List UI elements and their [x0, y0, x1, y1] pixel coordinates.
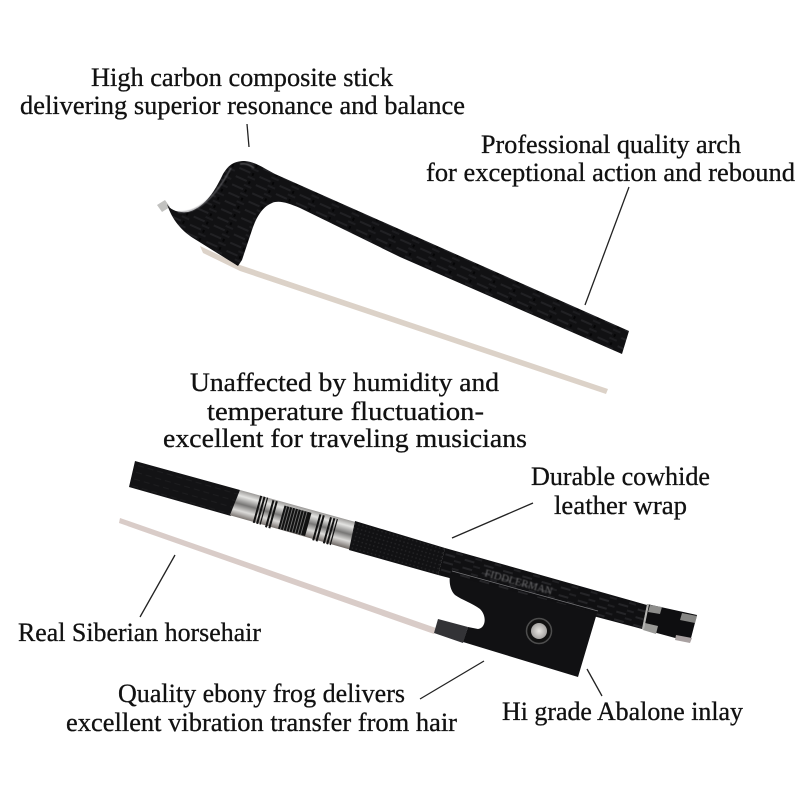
- leader line: stick: [247, 124, 249, 147]
- ferrule: [434, 619, 468, 643]
- head highlight: [178, 164, 254, 212]
- text: professional arch: [426, 130, 795, 187]
- bow head and stick: [167, 161, 629, 354]
- text: abalone inlay: Hi grade Abalone inlay: [502, 697, 743, 726]
- leather grip: [349, 521, 445, 575]
- bow hair: lower: [119, 518, 436, 634]
- text: humidity: [163, 368, 527, 453]
- bow hair: upper: [200, 246, 608, 394]
- text: humidity: temperature fluctuation-: [207, 397, 484, 426]
- bow tip: [642, 604, 697, 643]
- leader line: frog: [420, 661, 484, 699]
- frog: [450, 575, 597, 677]
- frog edge line: [452, 571, 598, 611]
- upper bow: tip and stick: [157, 161, 629, 394]
- abalone eye: [526, 618, 552, 644]
- metal winding: [229, 489, 358, 551]
- text: carbon composite stick: delivering superior resonance and balance: [20, 91, 465, 120]
- leader line: arch: [585, 187, 629, 305]
- text: horsehair: Real Siberian horsehair: [18, 618, 261, 647]
- stick section: [129, 461, 240, 516]
- leader line: horsehair: [140, 555, 175, 617]
- text: ebony frog: excellent vibration transfer from hair: [66, 708, 457, 737]
- text: carbon composite stick: High carbon composite stick: [91, 63, 393, 92]
- leader line: abalone: [587, 669, 602, 696]
- tip plate: [157, 200, 170, 212]
- text: ebony frog: Quality ebony frog delivers: [118, 679, 405, 708]
- text: ebony frog: [66, 679, 457, 737]
- text: leather wrap: Durable cowhide: [531, 462, 710, 491]
- text: carbon composite stick: [20, 63, 465, 120]
- text: leather wrap: leather wrap: [554, 491, 687, 520]
- leader line: leather: [452, 503, 533, 538]
- stick to tip: [438, 548, 647, 629]
- text: professional arch: Professional quality arch: [481, 130, 741, 159]
- maker stamp: FIDDLERMAN: [483, 567, 554, 598]
- lower bow: stick, winding, grip, frog: [119, 461, 697, 677]
- text: professional arch: for exceptional action and rebound: [426, 158, 795, 187]
- text: leather wrap: [531, 462, 710, 520]
- text: humidity: Unaffected by humidity and: [190, 368, 499, 397]
- text: humidity: excellent for traveling musicians: [163, 424, 527, 453]
